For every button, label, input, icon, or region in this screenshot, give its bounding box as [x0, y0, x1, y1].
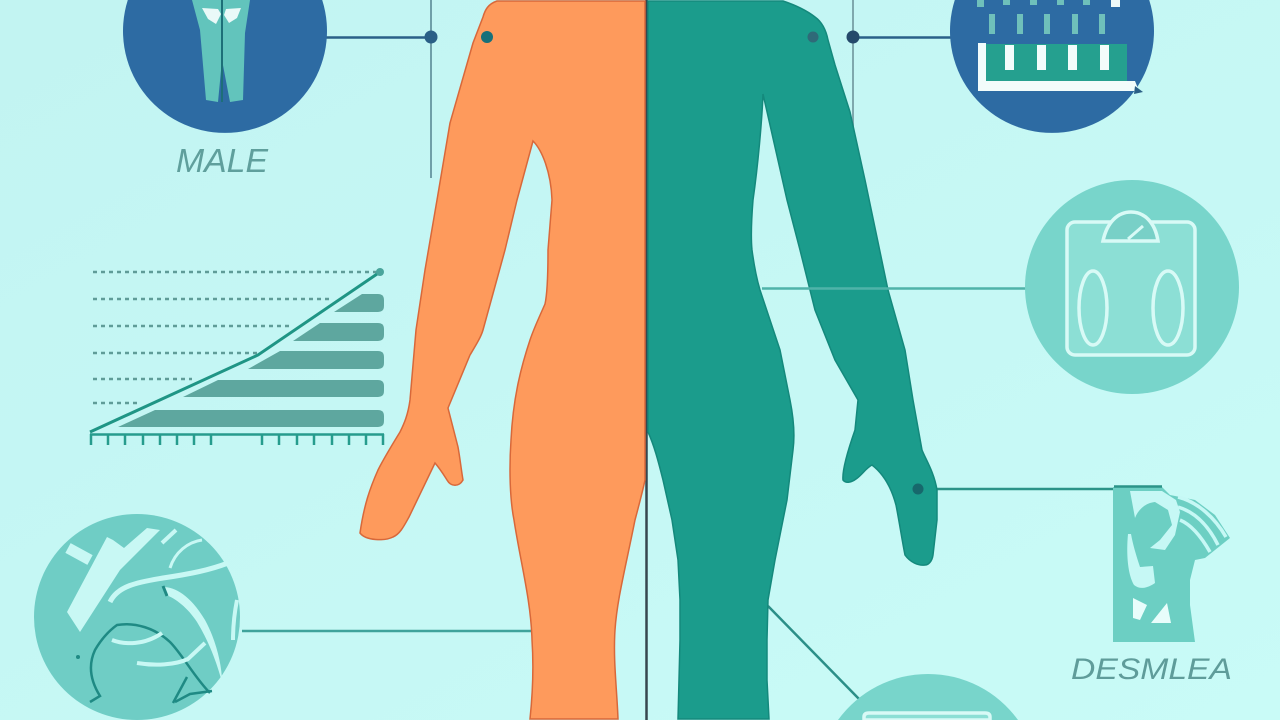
joint markers	[481, 31, 924, 494]
label: desmlea: DESMLEA	[1071, 653, 1232, 686]
chart trend line	[90, 272, 380, 432]
line across teal body	[762, 287, 1026, 290]
icon: weighing scale circle	[1025, 180, 1239, 394]
icon: male figure circle	[123, 0, 327, 133]
chart: rising trend with bars	[90, 268, 384, 445]
icon: bottom circle	[838, 674, 1018, 720]
body: orange left half	[360, 1, 645, 719]
label: male: MALE	[176, 142, 269, 179]
chart bars	[118, 294, 384, 427]
icon: bones circle	[34, 514, 240, 720]
chart dotted guide lines	[93, 272, 378, 403]
body: teal right half	[648, 1, 937, 719]
chart axis	[90, 434, 384, 445]
connector lines	[242, 0, 1114, 700]
icon: torso figure	[1113, 486, 1230, 642]
center divider line	[645, 0, 648, 720]
connector dots	[424, 30, 860, 44]
icon: bar chart circle	[950, 0, 1154, 133]
